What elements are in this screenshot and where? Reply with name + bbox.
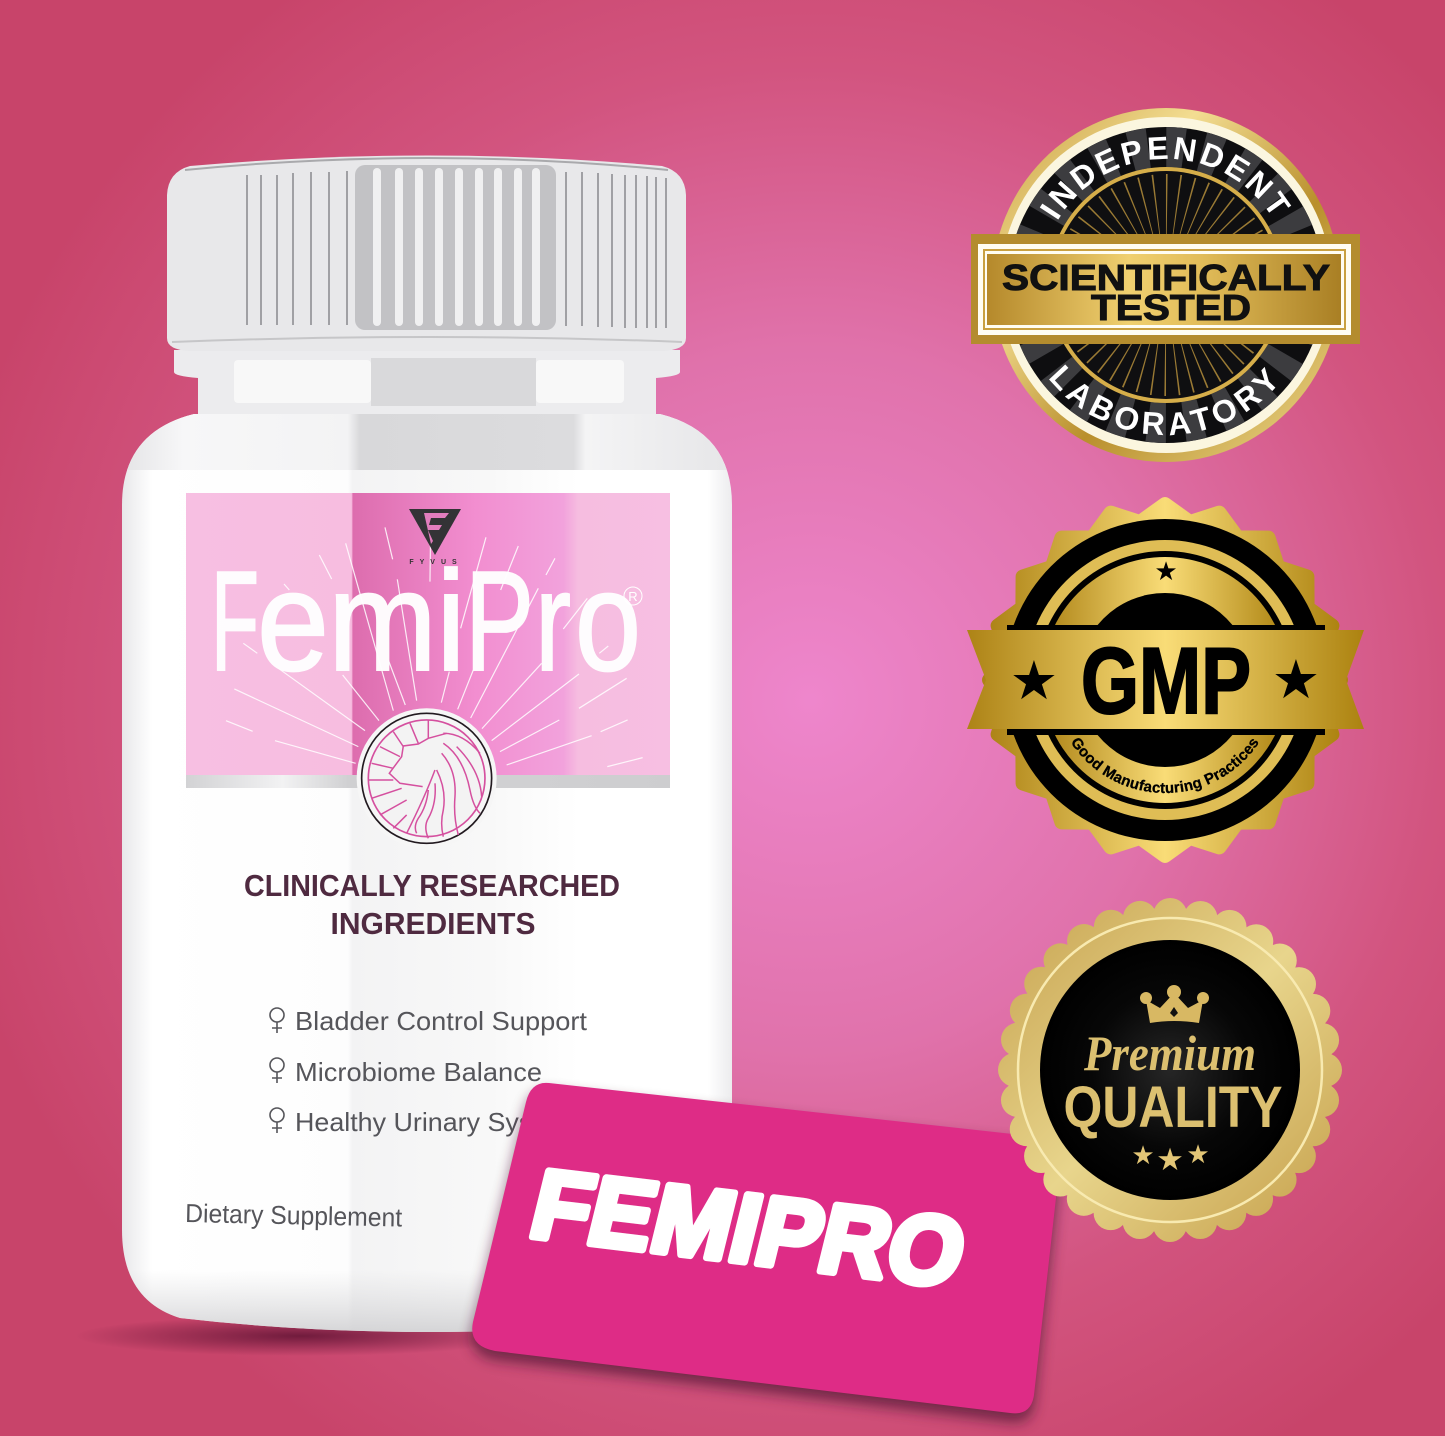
ribbon [967, 630, 1364, 729]
ribbon stars: ★ [1010, 651, 1058, 711]
gold banner: TESTED [1091, 287, 1251, 328]
three stars [1131, 1139, 1210, 1177]
FemiPro wordmark: e [257, 542, 329, 701]
quality word: QUALITY [1064, 1075, 1282, 1140]
woman emblem [357, 708, 497, 848]
premium script: Premium [1083, 1025, 1256, 1081]
registered mark [624, 587, 642, 605]
brand logo mark: FYVUS [409, 559, 463, 566]
gold banner [971, 234, 1360, 344]
three stars: ★ [1186, 1139, 1210, 1169]
FemiPro wordmark: i [436, 542, 466, 701]
bottle body [122, 410, 732, 1334]
top star: ★ [1154, 556, 1178, 586]
FemiPro wordmark: o [575, 542, 641, 701]
benefits list [270, 1006, 588, 1137]
badge: GMP [967, 497, 1364, 863]
bottle shadow [75, 1316, 525, 1356]
claim heading: INGREDIENTS [330, 906, 536, 941]
FemiPro wordmark: m [328, 542, 437, 701]
brand logo mark [409, 509, 463, 566]
benefit: bladder control: Bladder Control Support [295, 1006, 588, 1036]
badge: independent laboratory [971, 108, 1360, 462]
sun rays [226, 527, 643, 767]
pink card [472, 1083, 1060, 1422]
bottle neck [174, 350, 680, 420]
card brand text: FEMIPRO [521, 1149, 976, 1308]
FemiPro wordmark: P [465, 542, 534, 701]
FemiPro wordmark: r [535, 542, 571, 701]
claim heading [244, 868, 620, 941]
registered mark: R [628, 589, 638, 604]
ring text bottom: LABORATORY [1049, 364, 1276, 436]
ribbon stars: ★ [1272, 650, 1320, 710]
ribbon stars [1010, 650, 1320, 711]
GMP text: GMP [1081, 628, 1251, 733]
claim heading: CLINICALLY RESEARCHED [244, 868, 620, 903]
benefit: urinary: Healthy Urinary System [295, 1107, 577, 1137]
three stars: ★ [1131, 1140, 1155, 1170]
bottle cap [167, 156, 686, 351]
badge: premium quality [1015, 915, 1325, 1225]
three stars: ★ [1156, 1142, 1184, 1177]
crown icon [1140, 985, 1209, 1023]
supplement bottle [122, 156, 732, 1334]
pink label panel [186, 493, 670, 788]
gold banner: SCIENTIFICALLY [1002, 257, 1330, 298]
FemiPro wordmark: F [211, 542, 259, 701]
dietary supplement note: Dietary Supplement [185, 1198, 403, 1233]
arc caption: Good Manufacturing Practices [1072, 738, 1258, 794]
ring text top: INDEPENDENT [1040, 136, 1292, 220]
benefit: microbiome: Microbiome Balance [295, 1057, 542, 1087]
